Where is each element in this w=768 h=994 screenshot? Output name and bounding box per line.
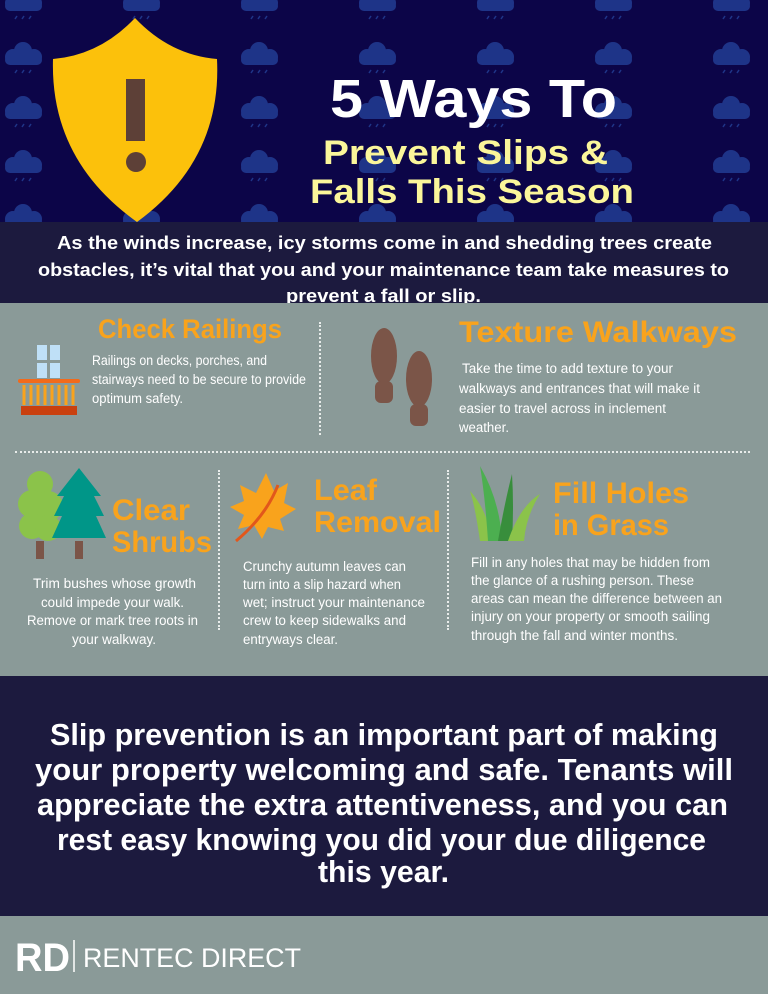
text: shrubs: could impede your walk.	[41, 595, 184, 610]
text: texture: Take the time to add texture to your	[462, 361, 673, 376]
title: Falls This Season	[310, 173, 634, 211]
text: fill holes: injury on your property or smooth sailing	[471, 609, 710, 624]
text: railings: Railings on decks, porches, and	[92, 353, 267, 368]
text: leaf: Crunchy autumn leaves can	[243, 559, 406, 574]
text: leaf: entryways clear.	[243, 632, 338, 647]
heading: check railings: Check Railings	[98, 314, 282, 344]
intro band: obstacles, it’s vital that you and your maintenance team take measures to	[38, 259, 729, 280]
text: leaf: wet; instruct your maintenance	[242, 595, 425, 610]
closing statement: your property welcoming and safe. Tenants will	[35, 752, 733, 787]
text: shrubs: Remove or mark tree roots in	[27, 613, 198, 628]
icon: railing window	[18, 345, 80, 415]
closing statement: Slip prevention is an important part of making	[50, 717, 718, 752]
closing statement: appreciate the extra attentiveness, and you can	[37, 787, 728, 822]
intro band: As the winds increase, icy storms come in and shedding trees create	[57, 232, 712, 253]
text: fill holes: Fill in any holes that may be hidden from	[471, 555, 710, 570]
panel: fill holes	[470, 466, 722, 643]
title	[310, 69, 634, 211]
text: shrubs	[27, 576, 198, 647]
text: shrubs: Trim bushes whose growth	[33, 576, 196, 591]
text: leaf	[242, 559, 425, 647]
icon: leaf	[230, 473, 296, 541]
title: 5 Ways To	[330, 69, 617, 129]
heading: fill holes: Fill Holes	[553, 477, 689, 510]
heading: leaf removal: Leaf	[314, 474, 378, 507]
intro band	[0, 222, 768, 303]
heading: texture walkways: Texture Walkways	[459, 316, 737, 349]
text: shrubs: your walkway.	[72, 632, 156, 647]
panel: clear shrubs: Shrubs	[112, 526, 212, 559]
panel: texture walkways	[371, 316, 737, 435]
panel: check railings	[18, 314, 306, 415]
closing statement	[0, 676, 768, 916]
text: texture: weather.	[458, 420, 509, 435]
text: fill holes: areas can mean the difference between an	[471, 591, 722, 606]
panel: fill holes: in Grass	[553, 509, 669, 542]
header	[0, 0, 768, 222]
text: fill holes: through the fall and winter months.	[471, 628, 678, 643]
closing statement: this year.	[318, 854, 449, 889]
text: texture: walkways and entrances that will make it	[458, 381, 700, 396]
text: fill holes	[471, 555, 722, 643]
icon: footprints	[371, 328, 432, 426]
icon: warning shield	[52, 18, 218, 222]
footer logo: RENTEC DIRECT	[83, 943, 301, 973]
text: fill holes: the glance of a rushing person. These	[471, 573, 694, 588]
closing statement: rest easy knowing you did your due diligence	[57, 822, 706, 857]
icon: trees	[18, 468, 106, 559]
panel: leaf removal: Removal	[314, 506, 441, 539]
text: leaf: turn into a slip hazard when	[243, 577, 401, 592]
text: railings: optimum safety.	[92, 391, 183, 406]
footer logo	[15, 938, 301, 974]
heading: clear shrubs: Clear	[112, 494, 190, 527]
text: railings	[92, 353, 306, 406]
panel: clear shrubs	[18, 468, 212, 647]
text: texture: easier to travel across in inclement	[459, 401, 666, 416]
title: Prevent Slips &	[323, 134, 608, 172]
icon: grass	[470, 466, 540, 541]
text: texture	[458, 361, 700, 435]
text: leaf: crew to keep sidewalks and	[243, 613, 406, 628]
panel: leaf removal	[230, 473, 441, 647]
